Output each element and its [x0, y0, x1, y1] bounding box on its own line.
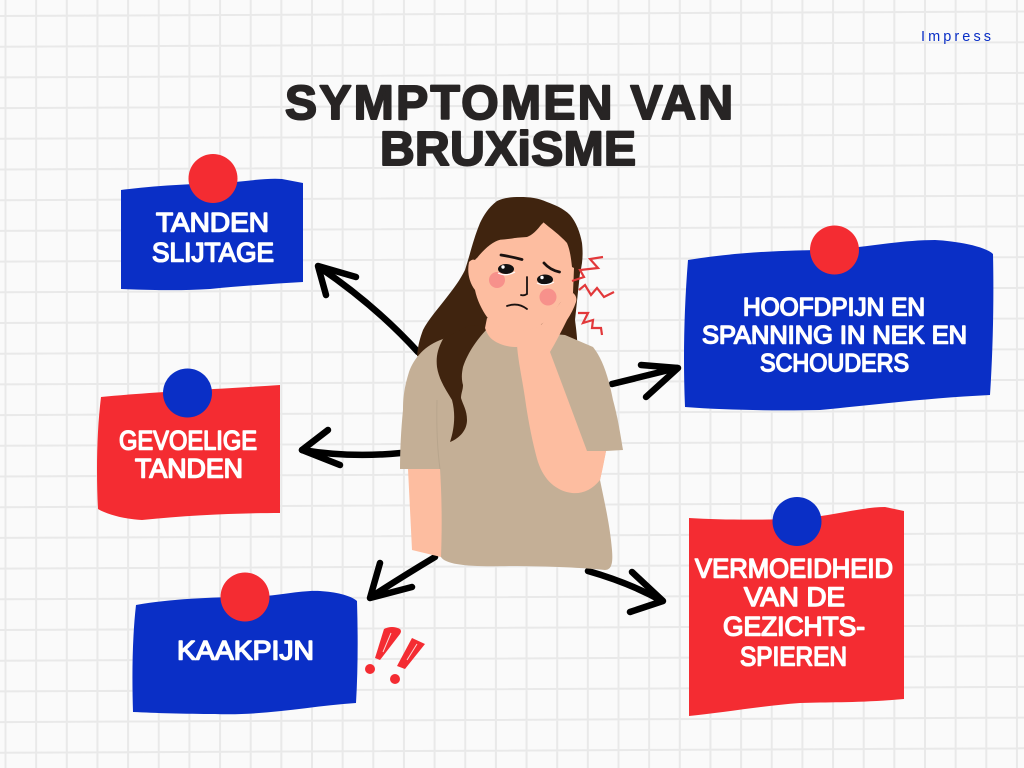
panel: hoofdpijn en spanning: SPANNING IN NEK EN: [702, 322, 967, 350]
left arm: [408, 469, 442, 557]
title: [285, 77, 733, 176]
pain zigzags: [572, 257, 614, 335]
panel: vermoeidheid: SPIEREN: [740, 642, 847, 672]
panel: gevoelige tanden: GEVOELIGE: [119, 426, 257, 456]
shirt: [400, 328, 623, 570]
title: BRUXiSME: [380, 123, 636, 176]
nose and mouth: [507, 277, 527, 309]
face: [468, 222, 574, 332]
cheeks: [489, 272, 505, 288]
panel: tanden slijtage: SLIJTAGE: [152, 238, 274, 268]
hair back: [417, 197, 583, 365]
panel: vermoeidheid: VAN DE: [744, 582, 845, 612]
panel: vermoeidheid: [689, 497, 904, 716]
brand label: Impress: [921, 29, 991, 45]
panel: tanden slijtage: [121, 154, 303, 290]
forearm and hand: [517, 293, 606, 493]
panel: hoofdpijn en spanning: HOOFDPIJN EN: [743, 294, 925, 322]
arrow: to gevoelige tanden: [302, 430, 401, 465]
arrow: to tanden slijtage: [318, 266, 418, 352]
arrow: to vermoeidheid: [588, 571, 663, 612]
panel: hoofdpijn en spanning: SCHOUDERS: [760, 350, 909, 378]
title: SYMPTOMEN VAN: [285, 77, 733, 130]
panel: kaakpijn: [132, 572, 358, 714]
panel: tanden slijtage: TANDEN: [156, 208, 269, 238]
sleeve seam: [437, 400, 440, 469]
hairline detail: [476, 222, 543, 258]
arrow: to hoofdpijn: [612, 365, 678, 397]
brows: [501, 255, 560, 272]
panel: hoofdpijn en spanning: [684, 226, 993, 410]
eyes: [498, 264, 514, 274]
arrow: to kaakpijn: [370, 557, 435, 598]
hair strand over shirt: [437, 325, 489, 442]
panel: vermoeidheid: GEZICHTS-: [723, 612, 865, 642]
panel: vermoeidheid: VERMOEIDHEID: [695, 554, 893, 584]
panel: gevoelige tanden: [97, 368, 280, 520]
illustration: worried woman holding her cheek: [400, 197, 623, 570]
panel: kaakpijn: KAAKPIJN: [177, 636, 314, 666]
icon: exclamation marks: [365, 627, 425, 684]
panel: gevoelige tanden: TANDEN: [135, 454, 243, 484]
neck: [485, 318, 545, 347]
